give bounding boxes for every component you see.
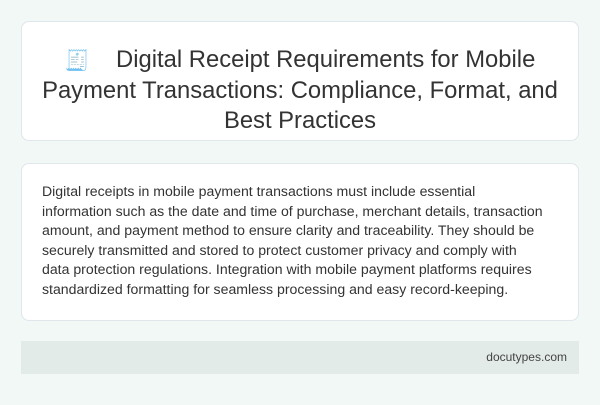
description text: information such as the date and time of purchase, merchant details, transaction — [42, 202, 543, 218]
description text: standardized formatting for seamless processing and easy record-keeping. — [42, 280, 508, 296]
description text: securely transmitted and stored to protect customer privacy and comply with — [42, 242, 517, 258]
description text: data protection regulations. Integration with mobile payment platforms requires — [42, 261, 532, 277]
footer: docutypes.com — [486, 350, 567, 364]
footer — [21, 341, 579, 374]
title: 🧾 Digital Receipt Requirements for Mobile Payment Transactions: Compliance, Format, and Best Practices — [42, 46, 558, 134]
description text: Digital receipts in mobile payment transactions must include essential — [42, 183, 475, 199]
description text — [42, 183, 543, 297]
description text: amount, and payment method to ensure clarity and traceability. They should be — [42, 222, 534, 238]
title card — [21, 21, 579, 141]
description card — [21, 163, 579, 321]
